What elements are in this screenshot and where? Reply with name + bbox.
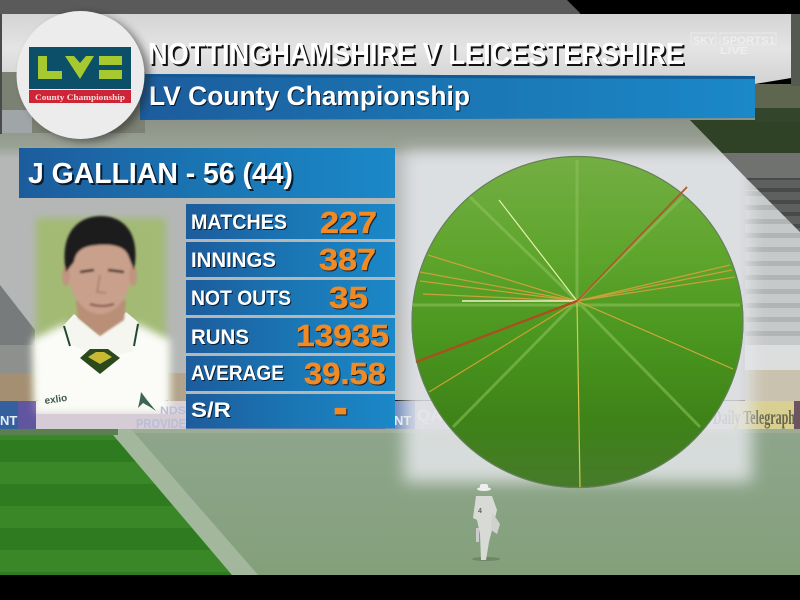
subtitle ribbon <box>140 74 755 120</box>
row: matches: MATCHES <box>191 211 287 234</box>
player name bar: J GALLIAN - 56 (44) <box>28 158 293 190</box>
row: innings: 387 <box>319 242 376 277</box>
player name bar <box>19 148 395 198</box>
row: not outs: 35 <box>329 280 368 315</box>
stats table <box>186 204 395 428</box>
player portrait <box>32 216 170 414</box>
row: strike rate <box>186 391 395 428</box>
broadcaster logo <box>691 33 776 57</box>
row: average: AVERAGE <box>191 362 284 385</box>
row: not outs <box>186 280 395 315</box>
scoring shots <box>416 187 735 487</box>
broadcaster logo: SKY <box>693 35 716 47</box>
subtitle text: LV County Championship <box>149 81 470 111</box>
scoring wheel <box>412 156 744 488</box>
faded board text over portrait: NDS <box>160 405 186 417</box>
broadcaster logo: LIVE <box>720 46 748 57</box>
row: innings: INNINGS <box>191 249 276 272</box>
top banner panel <box>0 0 800 134</box>
faded board text over portrait: PROVIDE <box>136 416 186 431</box>
fielding guide lines <box>412 160 740 427</box>
row: average <box>186 356 395 391</box>
row: strike rate: S/R <box>191 399 231 422</box>
fielder <box>472 484 500 561</box>
shirt badges: exlio <box>44 393 68 407</box>
glow behind scoring wheel <box>404 152 752 482</box>
fence rail, right <box>745 345 800 370</box>
row: strike rate: - <box>335 391 346 426</box>
row: average: 39.58 <box>304 356 386 391</box>
top-right unfaded corner <box>690 84 800 232</box>
row: not outs: NOT OUTS <box>191 287 291 310</box>
fielder: 4 <box>478 508 482 515</box>
head <box>62 216 137 336</box>
row: innings <box>186 242 395 277</box>
row: matches <box>186 204 395 240</box>
LV mark <box>38 56 122 79</box>
row: runs: RUNS <box>191 326 249 349</box>
row: runs <box>186 318 395 353</box>
letterbox bar <box>0 575 800 600</box>
row: matches: 227 <box>320 205 377 240</box>
unfaded grass wedge <box>0 429 258 575</box>
advertising boards: NT <box>0 413 17 428</box>
pitch, faded area <box>0 429 800 575</box>
title: NOTTINGHAMSHIRE V LEICESTERSHIRE <box>148 36 684 71</box>
broadcaster logo: SPORTS1 <box>722 35 775 47</box>
collar <box>64 312 138 358</box>
advertising boards: NT <box>394 413 411 428</box>
LV logo roundel <box>16 11 150 142</box>
row: runs: 13935 <box>296 318 389 353</box>
advertising boards <box>0 401 800 429</box>
faded board text over portrait <box>18 401 186 431</box>
advertising boards: QA <box>417 406 442 425</box>
LV logo roundel: County Championship <box>35 92 125 102</box>
